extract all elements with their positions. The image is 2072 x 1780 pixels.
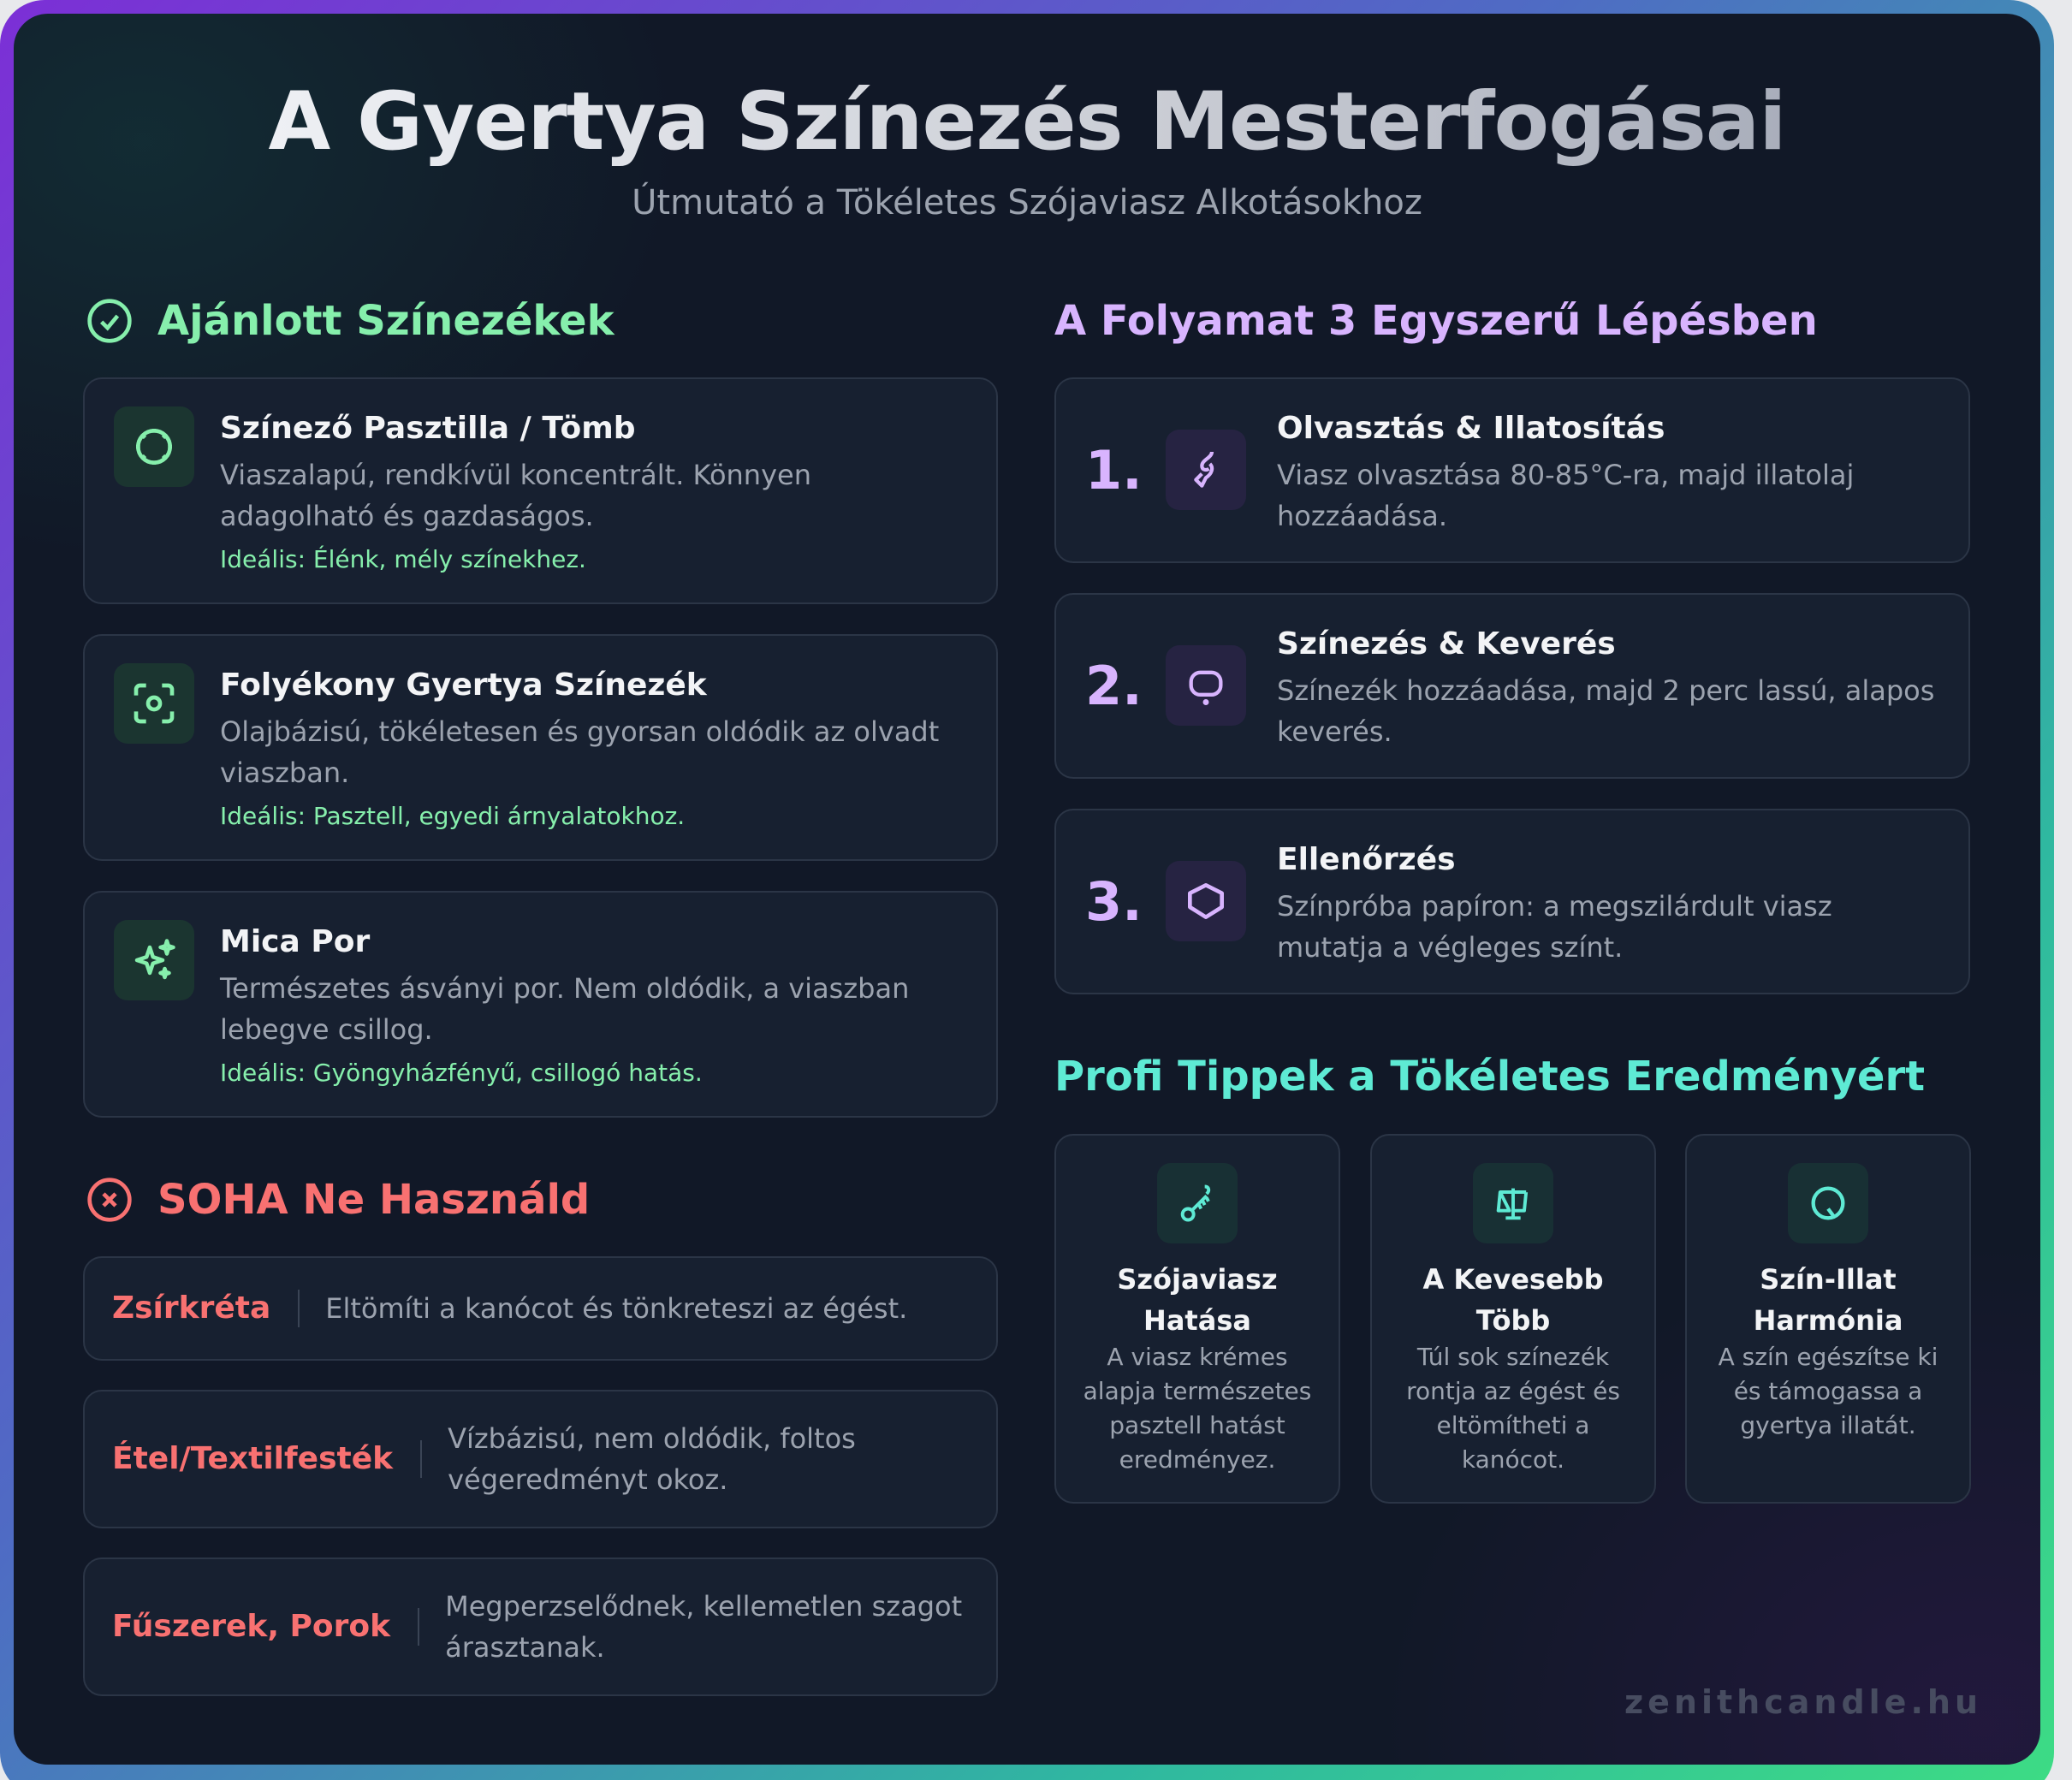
icon: hexagon xyxy=(1166,861,1246,941)
step desc: Színezék hozzáadása, majd 2 perc lassú, alapos keverés. xyxy=(1277,674,1934,748)
tip title: A Kevesebb xyxy=(1423,1263,1603,1296)
icon: soy xyxy=(1157,1163,1238,1243)
step title: Színezés & Keverés xyxy=(1277,626,1616,662)
heading: process: A Folyamat 3 Egyszerű Lépésben xyxy=(1054,297,1818,345)
tip desc: kanócot. xyxy=(1462,1445,1564,1474)
bad item: crayon: Zsírkréta xyxy=(112,1290,270,1326)
tip title: Szójaviasz xyxy=(1117,1263,1278,1296)
icon: liquid xyxy=(114,663,194,744)
number: 3. xyxy=(1085,870,1143,933)
icon: flame xyxy=(1166,430,1246,510)
subtitle: Útmutató a Tökéletes Szójaviasz Alkotásokhoz xyxy=(632,183,1422,222)
bad item: food dye: Étel/Textilfesték xyxy=(112,1441,393,1476)
tip desc: gyertya illatát. xyxy=(1740,1411,1916,1439)
tip 3 xyxy=(1685,1134,1971,1504)
card title: Mica Por xyxy=(220,924,370,959)
step title: Ellenőrzés xyxy=(1277,842,1456,877)
tip desc xyxy=(1083,1343,1311,1474)
tip desc: pasztell hatást xyxy=(1109,1411,1285,1439)
tip desc: rontja az égést és xyxy=(1406,1377,1620,1405)
tip title xyxy=(1422,1263,1603,1337)
tip title xyxy=(1754,1263,1903,1337)
step 1 xyxy=(1054,377,1970,563)
panel: card mica xyxy=(83,891,998,1118)
icon: scale xyxy=(1473,1163,1553,1243)
bad item: crayon: Eltömíti a kanócot és tönkreteszi az égést. xyxy=(325,1292,907,1325)
card title: Színező Pasztilla / Tömb xyxy=(220,411,636,446)
number: 2. xyxy=(1085,655,1143,717)
heading: tips: Profi Tippek a Tökéletes Eredményért xyxy=(1054,1053,1925,1101)
bad item: food dye xyxy=(83,1390,998,1528)
bad item: crayon xyxy=(83,1256,998,1361)
number: 1. xyxy=(1085,439,1143,501)
title: A Gyertya Színezés Mesterfogásai xyxy=(269,75,1785,169)
bad item: spices: Megperzselődnek, kellemetlen szagot árasztanak. xyxy=(445,1590,962,1664)
tip title: Hatása xyxy=(1143,1304,1251,1337)
panel: card pastille xyxy=(83,377,998,604)
card desc: Olajbázisú, tökéletesen és gyorsan oldódik az olvadt viaszban. xyxy=(220,715,939,789)
icon: circle xyxy=(1788,1163,1868,1243)
tip desc: alapja természetes xyxy=(1083,1377,1311,1405)
step desc: Viasz olvasztása 80-85°C-ra, majd illatolaj hozzáadása. xyxy=(1277,459,1854,532)
tip desc xyxy=(1719,1343,1938,1439)
icon: pastille xyxy=(114,406,194,487)
heading: never use: SOHA Ne Használd xyxy=(157,1176,590,1224)
bad item: food dye: Vízbázisú, nem oldódik, foltos végeredményt okoz. xyxy=(448,1422,856,1496)
step 2 xyxy=(1054,593,1970,779)
tip desc: A viasz krémes xyxy=(1107,1343,1288,1371)
tip desc xyxy=(1406,1343,1620,1474)
tip desc: A szín egészítse ki xyxy=(1719,1343,1938,1371)
bad item: spices xyxy=(83,1558,998,1696)
ideal: Ideális: Élénk, mély színekhez. xyxy=(220,545,586,573)
tip desc: eltömítheti a xyxy=(1437,1411,1589,1439)
card desc: Természetes ásványi por. Nem oldódik, a viaszban lebegve csillog. xyxy=(220,972,909,1046)
tip desc: Túl sok színezék xyxy=(1417,1343,1609,1371)
heading: recommended: Ajánlott Színezékek xyxy=(157,297,614,345)
bad item: spices: Fűszerek, Porok xyxy=(112,1609,390,1644)
footer brand: zenithcandle.hu xyxy=(1624,1683,1982,1721)
tip title xyxy=(1117,1263,1278,1337)
ideal: Ideális: Gyöngyházfényű, csillogó hatás. xyxy=(220,1059,703,1087)
tip 2 xyxy=(1370,1134,1656,1504)
tip desc: és támogassa a xyxy=(1734,1377,1922,1405)
step title: Olvasztás & Illatosítás xyxy=(1277,411,1665,446)
step 3 xyxy=(1054,809,1970,994)
tip desc: eredményez. xyxy=(1119,1445,1275,1474)
step desc: Színpróba papíron: a megszilárdult viasz mutatja a végleges színt. xyxy=(1277,890,1832,964)
panel: card liquid xyxy=(83,634,998,861)
tip title: Több xyxy=(1476,1304,1550,1337)
card desc: Viaszalapú, rendkívül koncentrált. Könnyen adagolható és gazdaságos. xyxy=(220,459,811,532)
ideal: Ideális: Pasztell, egyedi árnyalatokhoz. xyxy=(220,802,685,830)
icon: sparkles xyxy=(114,920,194,1000)
card title: Folyékony Gyertya Színezék xyxy=(220,668,707,703)
tip title: Harmónia xyxy=(1754,1304,1903,1337)
icon: bowl xyxy=(1166,645,1246,726)
tip title: Szín-Illat xyxy=(1760,1263,1897,1296)
tip 1 xyxy=(1054,1134,1340,1504)
